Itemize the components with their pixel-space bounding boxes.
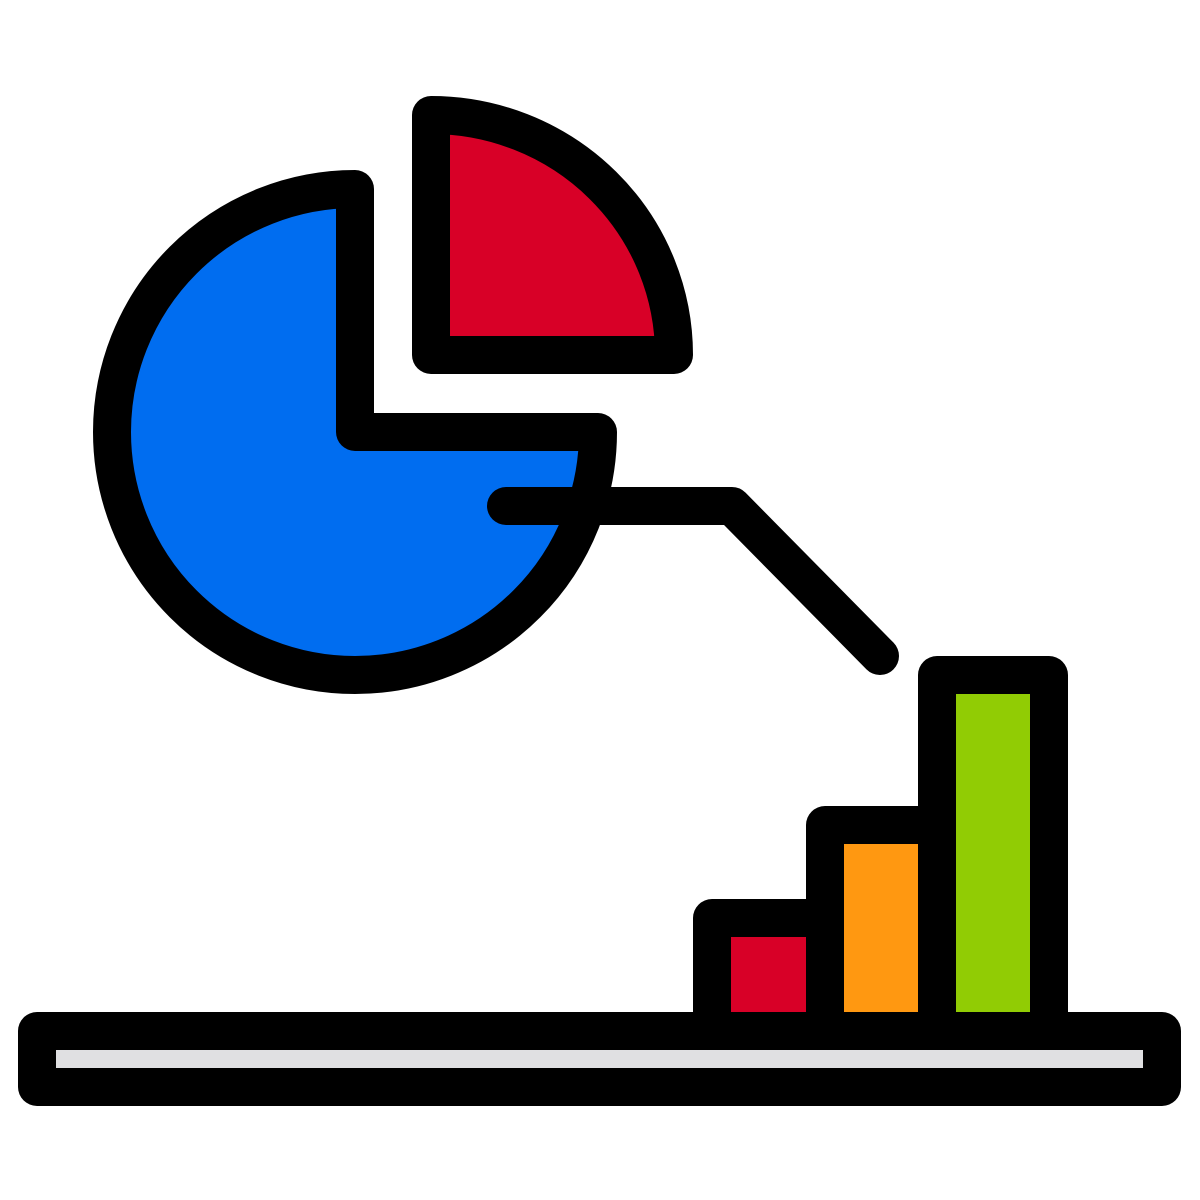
pie: red separated slice	[431, 115, 674, 355]
arrow: connector line	[506, 506, 880, 656]
bar: orange	[825, 825, 937, 1031]
bar: red	[712, 918, 825, 1031]
bar: green	[937, 675, 1049, 1031]
base bar	[37, 1031, 1162, 1087]
pie: blue main slice	[112, 189, 598, 675]
